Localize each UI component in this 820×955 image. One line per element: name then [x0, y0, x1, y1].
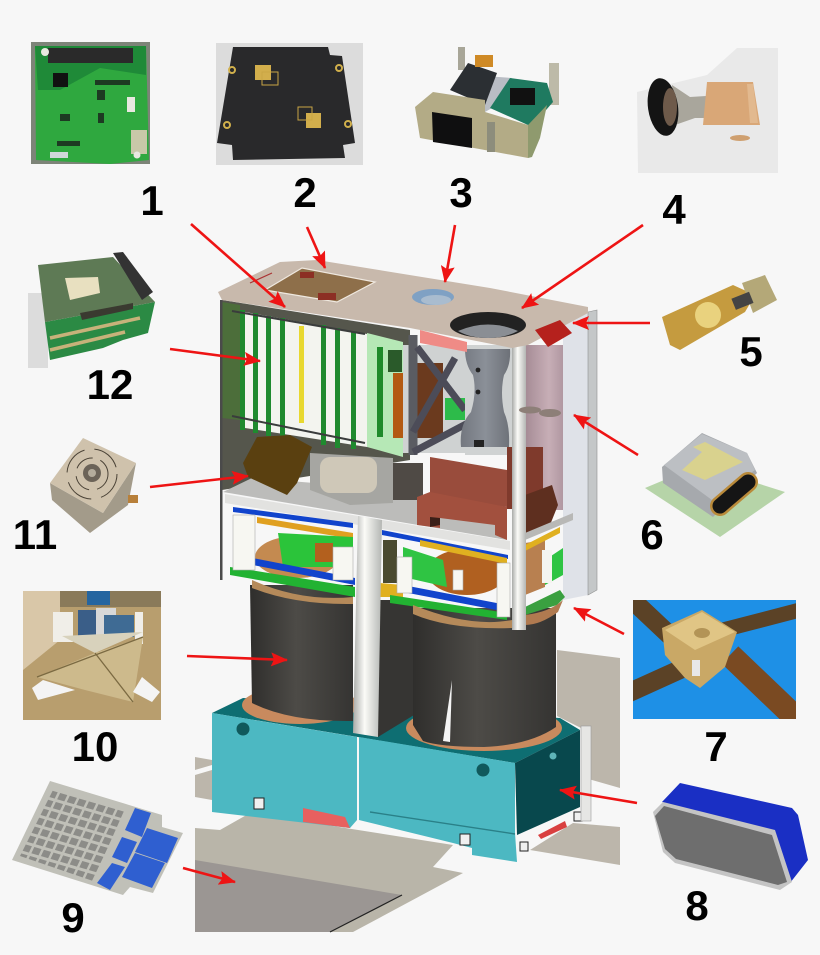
- left edge: [220, 300, 222, 580]
- label 10: 10: [72, 723, 118, 770]
- label 12: 12: [87, 361, 133, 408]
- panel 7: cross joint: [633, 600, 796, 719]
- panel 5: gold card: [662, 275, 777, 350]
- label 5: 5: [739, 328, 763, 375]
- cylinder: left: [250, 585, 353, 721]
- white front column right: [512, 345, 526, 630]
- left mechanism: [230, 507, 355, 604]
- top plate aperture: [450, 312, 526, 338]
- interior right background: [465, 345, 512, 455]
- back and side sheets: [195, 650, 620, 865]
- arrow 9: [183, 868, 235, 882]
- pink bracket: [420, 330, 467, 352]
- card rails: [232, 311, 365, 443]
- label 1: 1: [140, 177, 164, 224]
- arrow 5: [573, 322, 650, 324]
- white electronics panels: [245, 312, 367, 447]
- tanks: [519, 406, 561, 417]
- label 3: 3: [449, 169, 473, 216]
- lattice bracket: [413, 335, 468, 455]
- panel 10: solar sail photo: [23, 591, 161, 720]
- right bay pink panel: [525, 345, 565, 510]
- side mechanism: [525, 513, 573, 625]
- label 11: 11: [13, 511, 57, 558]
- main assembly: [195, 260, 620, 932]
- cylinder: middle: [378, 600, 414, 737]
- red sensor: [535, 320, 572, 347]
- right mechanism: [380, 530, 512, 628]
- panel 12: stacked boards: [28, 252, 155, 368]
- interior background: [222, 300, 410, 490]
- yellow card: [299, 326, 304, 423]
- rear white rail at base: [581, 726, 591, 821]
- arrow 7: [574, 608, 624, 634]
- white center column: [353, 516, 382, 737]
- teal base: left front: [212, 713, 357, 828]
- arrow 11: [150, 476, 248, 487]
- top plate recess: [250, 268, 375, 302]
- arrow 8: [560, 790, 637, 803]
- arrow 1: [191, 224, 285, 307]
- panel 1: circuit board: [31, 42, 150, 164]
- arrow 3: [445, 225, 455, 282]
- panel 8: blue cased box: [653, 783, 808, 890]
- deck: [223, 478, 510, 550]
- arrow 12: [170, 349, 260, 361]
- light green board: [367, 333, 403, 457]
- panel 11: reaction mechanism: [50, 438, 138, 533]
- panel 9: solar array: [12, 781, 183, 895]
- arrow 10: [187, 656, 287, 660]
- reaction wheel: [310, 453, 423, 505]
- arrow 6: [574, 415, 638, 455]
- cylinder: right: [413, 608, 556, 747]
- brown insulated unit: [243, 435, 312, 495]
- teal base: side: [515, 730, 580, 835]
- deployable sheet: [195, 813, 463, 932]
- label 8: 8: [685, 882, 709, 929]
- brown block behind lattice: [393, 345, 467, 453]
- base holes: [236, 722, 556, 776]
- label 6: 6: [640, 511, 664, 558]
- panel 2: black plate: [216, 43, 363, 165]
- teal base: right front: [359, 737, 517, 862]
- top plate port: [412, 289, 454, 305]
- teal base: top face: [212, 698, 580, 763]
- label 4: 4: [662, 186, 686, 233]
- optical horn: [461, 349, 510, 447]
- label 2: 2: [293, 169, 317, 216]
- red connector front: [303, 808, 350, 828]
- top plate: [218, 260, 588, 348]
- panel 4: horn sensor: [637, 48, 778, 173]
- arrow 4: [522, 225, 643, 308]
- panel 3: camera: [415, 47, 559, 158]
- brown mechanism: [525, 485, 558, 535]
- left wall green board: [222, 302, 240, 420]
- right rail: [563, 310, 597, 600]
- brown stand: [417, 447, 543, 540]
- arrow 2: [307, 227, 325, 268]
- base groove: [370, 812, 515, 834]
- label 9: 9: [61, 894, 85, 941]
- horn ports: [474, 368, 484, 447]
- green circuit cards: [240, 310, 356, 449]
- copper ring: right: [406, 705, 562, 751]
- copper ring: left: [242, 686, 358, 724]
- clips: [254, 798, 582, 851]
- red connector side: [538, 821, 567, 839]
- label 7: 7: [704, 723, 728, 770]
- panel 6: sensor box: [645, 433, 785, 537]
